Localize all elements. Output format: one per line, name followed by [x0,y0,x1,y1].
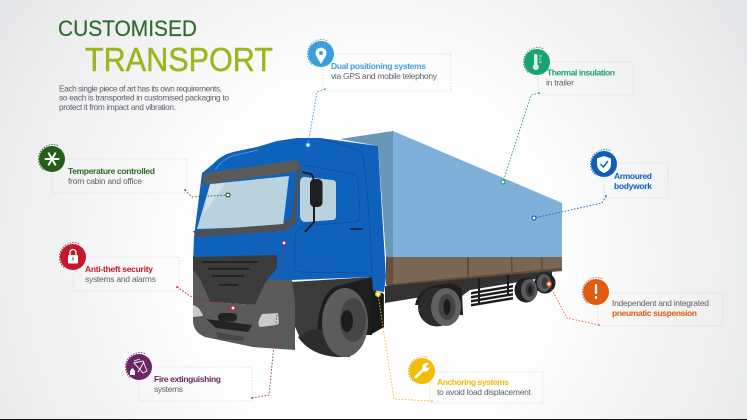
icon: fire extinguisher [126,354,152,380]
callout: temperature controlled: Temperature controlled [68,166,155,176]
callout: anti-theft security: systems and alarms [85,274,156,284]
windshield [197,176,289,229]
icon: padlock [60,244,86,270]
side window [300,177,336,222]
side guard [471,275,513,306]
title: TRANSPORT [85,41,273,78]
title [58,16,273,78]
drive wheel [415,283,463,326]
cab body [193,138,386,292]
callout: armoured bodywork [532,150,668,220]
callout: thermal insulation: Thermal insulation [547,68,615,78]
callout: temperature controlled: from cabin and office [68,176,142,186]
callout: temperature controlled [38,145,230,197]
callout: armoured bodywork: Armoured [614,171,652,181]
icon: shield [591,151,617,177]
callout: dual positioning systems: Dual positioning systems [331,61,426,71]
headlights [193,305,279,327]
callout: dual positioning systems [306,40,451,147]
callout: anchoring systems [376,292,543,403]
mirror [302,172,322,232]
intro text [59,84,229,112]
callout: fire extinguishing [125,241,286,401]
front wheel [298,288,368,357]
grille [193,255,277,305]
icon: snowflake [39,146,65,172]
windshield lower frame [193,165,301,237]
cab door outlines [295,139,372,277]
icon: location pin [308,41,334,67]
lower grille [206,313,252,332]
callout: anti-theft security: Anti-theft security [85,264,153,274]
callout: armoured bodywork: bodywork [614,181,652,191]
icon: wrench [409,358,435,384]
callout: pneumatic suspension: Independent and integrated [612,298,709,308]
cab highlights [215,150,258,170]
rear wheels [514,272,556,302]
chassis [385,271,552,303]
sun visor [202,160,301,185]
callout: pneumatic suspension [547,278,723,326]
callout: dual positioning systems: via GPS and mobile telephony [331,71,438,81]
cab lower dark section [290,277,384,338]
callout: pneumatic suspension: pneumatic suspension [612,308,697,318]
callout: anchoring systems: to avoid load displacement [437,387,532,397]
truck illustration [193,131,562,357]
icon: exclamation [583,279,609,305]
intro text: Each single piece of art has its own requirements, [59,84,222,94]
callout: fire extinguishing: Fire extinguishing [154,374,221,384]
front bumper [193,270,295,350]
callout: anti-theft security [59,243,235,310]
title: CUSTOMISED [58,16,197,41]
callout: anchoring systems: Anchoring systems [437,377,509,387]
intro text: protect it from impact and vibration. [59,102,176,112]
trailer body [340,131,562,287]
icon: thermometer [524,49,550,75]
callout: fire extinguishing: systems [154,384,183,394]
callout: thermal insulation: in trailer [546,78,574,88]
intro text: so each is transported in customised packaging to [59,92,229,102]
callout: thermal insulation [501,48,633,184]
